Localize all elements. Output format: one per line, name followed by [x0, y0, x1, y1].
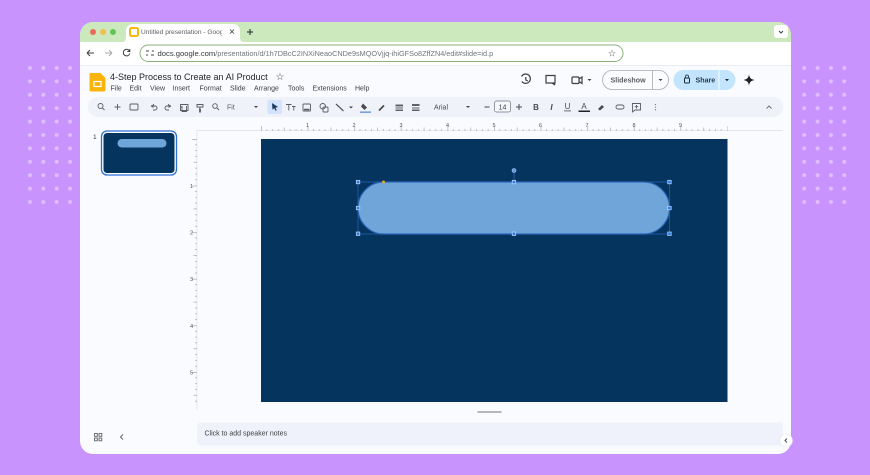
slideshow button: Slideshow	[610, 76, 646, 84]
selection frame and handles	[356, 168, 671, 236]
font size control: 14	[499, 104, 506, 112]
menu bar: Extensions	[312, 86, 347, 92]
text format icons: B	[533, 103, 539, 112]
vertical ruler: 2	[190, 230, 193, 236]
icon: text box	[286, 104, 296, 110]
vertical ruler: 3	[190, 277, 193, 283]
menu bar: Format	[200, 86, 222, 92]
icon: paint format	[197, 104, 203, 112]
text format icons	[533, 102, 604, 112]
vertical ruler	[190, 130, 197, 410]
icon: history	[522, 74, 530, 83]
icon: shape	[320, 104, 328, 112]
rounded rectangle shape	[358, 182, 670, 234]
browser tab strip	[80, 22, 791, 42]
text format icons: I	[550, 103, 553, 112]
vertical ruler: 1	[190, 184, 193, 190]
icon: print	[180, 104, 188, 112]
menu bar: File	[110, 86, 122, 92]
icon: add	[114, 104, 120, 110]
new tab button	[247, 29, 253, 35]
horizontal ruler: 2	[352, 123, 356, 129]
top right actions	[522, 70, 754, 90]
vertical ruler: 4	[190, 324, 193, 330]
divider	[80, 64, 791, 67]
text format icons: U	[565, 102, 571, 111]
toolbar	[88, 97, 783, 117]
slide canvas	[261, 139, 728, 402]
dot pattern: right	[793, 61, 847, 209]
slide number: 1	[93, 134, 97, 141]
icon: text box new slide	[130, 104, 138, 110]
side panel toggle	[780, 434, 792, 447]
icon: meet	[572, 77, 592, 84]
horizontal ruler: 8	[632, 123, 636, 129]
icon: image	[303, 104, 310, 111]
active tab: ✕	[229, 28, 235, 36]
menu bar: Tools	[288, 86, 305, 92]
address bar: ☆	[608, 48, 617, 60]
font size control	[484, 101, 522, 112]
icon: redo	[165, 104, 171, 110]
horizontal ruler	[197, 123, 783, 131]
icon: line	[336, 104, 344, 111]
address bar: docs.google.com/presentation/d/1h7DBcC2INXiNeaoCNDe9sMQOVjjq-ihiGFSo8ZffZN4/edit#slide=id.p	[158, 49, 493, 58]
menu bar: Arrange	[254, 86, 279, 92]
active tab	[122, 24, 244, 42]
active tab: Untitled presentation - Googl	[141, 29, 225, 36]
tab list button	[774, 25, 788, 38]
icon: collapse filmstrip	[120, 434, 123, 440]
horizontal ruler: 3	[399, 123, 403, 129]
slideshow button	[602, 70, 668, 90]
notes resize handle	[478, 412, 502, 413]
icon: border dash	[412, 104, 420, 111]
icon: comments	[546, 76, 555, 85]
horizontal ruler: 4	[446, 123, 449, 129]
vertical ruler: 5	[190, 370, 193, 376]
window controls	[90, 29, 116, 35]
speaker notes panel	[197, 422, 783, 446]
font select	[434, 104, 470, 112]
dot pattern: left	[23, 61, 77, 209]
horizontal ruler: 1	[306, 123, 309, 129]
font select: Arial	[434, 104, 448, 112]
address bar	[80, 42, 791, 65]
menu bar: Help	[355, 86, 370, 92]
horizontal ruler: 6	[539, 123, 542, 129]
menu bar: Insert	[172, 86, 190, 92]
horizontal ruler: 9	[679, 123, 682, 129]
icon: fill colour	[360, 104, 371, 113]
zoom select: Fit	[227, 104, 235, 112]
icon: star: ☆	[276, 72, 285, 83]
icon: gemini spark	[744, 74, 754, 86]
icon: more	[654, 104, 656, 110]
icon: border colour	[379, 106, 384, 110]
horizontal ruler: 7	[585, 123, 589, 129]
browser window	[80, 22, 792, 454]
icon: zoom	[213, 104, 219, 110]
text format icons: A	[581, 102, 587, 111]
share button: Share	[696, 76, 715, 84]
document title: 4-Step Process to Create an AI Product	[110, 72, 268, 82]
icon: link	[616, 105, 624, 109]
speaker notes panel: Click to add speaker notes	[204, 430, 287, 438]
filmstrip	[93, 131, 176, 175]
icon: border weight	[396, 104, 403, 111]
selected arrow tool	[268, 100, 282, 114]
icon: undo	[151, 104, 157, 110]
icon: search	[98, 104, 104, 110]
icon: add comment	[632, 104, 640, 112]
menu bar: View	[150, 86, 166, 92]
horizontal ruler: 5	[492, 123, 496, 129]
slide thumbnail	[102, 131, 176, 175]
share button	[674, 70, 736, 90]
icon: grid view	[94, 434, 102, 441]
zoom select	[227, 104, 258, 112]
icon: collapse toolbar	[766, 106, 772, 108]
menu bar: Edit	[130, 86, 142, 92]
icon: slides logo	[90, 73, 106, 92]
menu bar: Slide	[230, 86, 246, 92]
